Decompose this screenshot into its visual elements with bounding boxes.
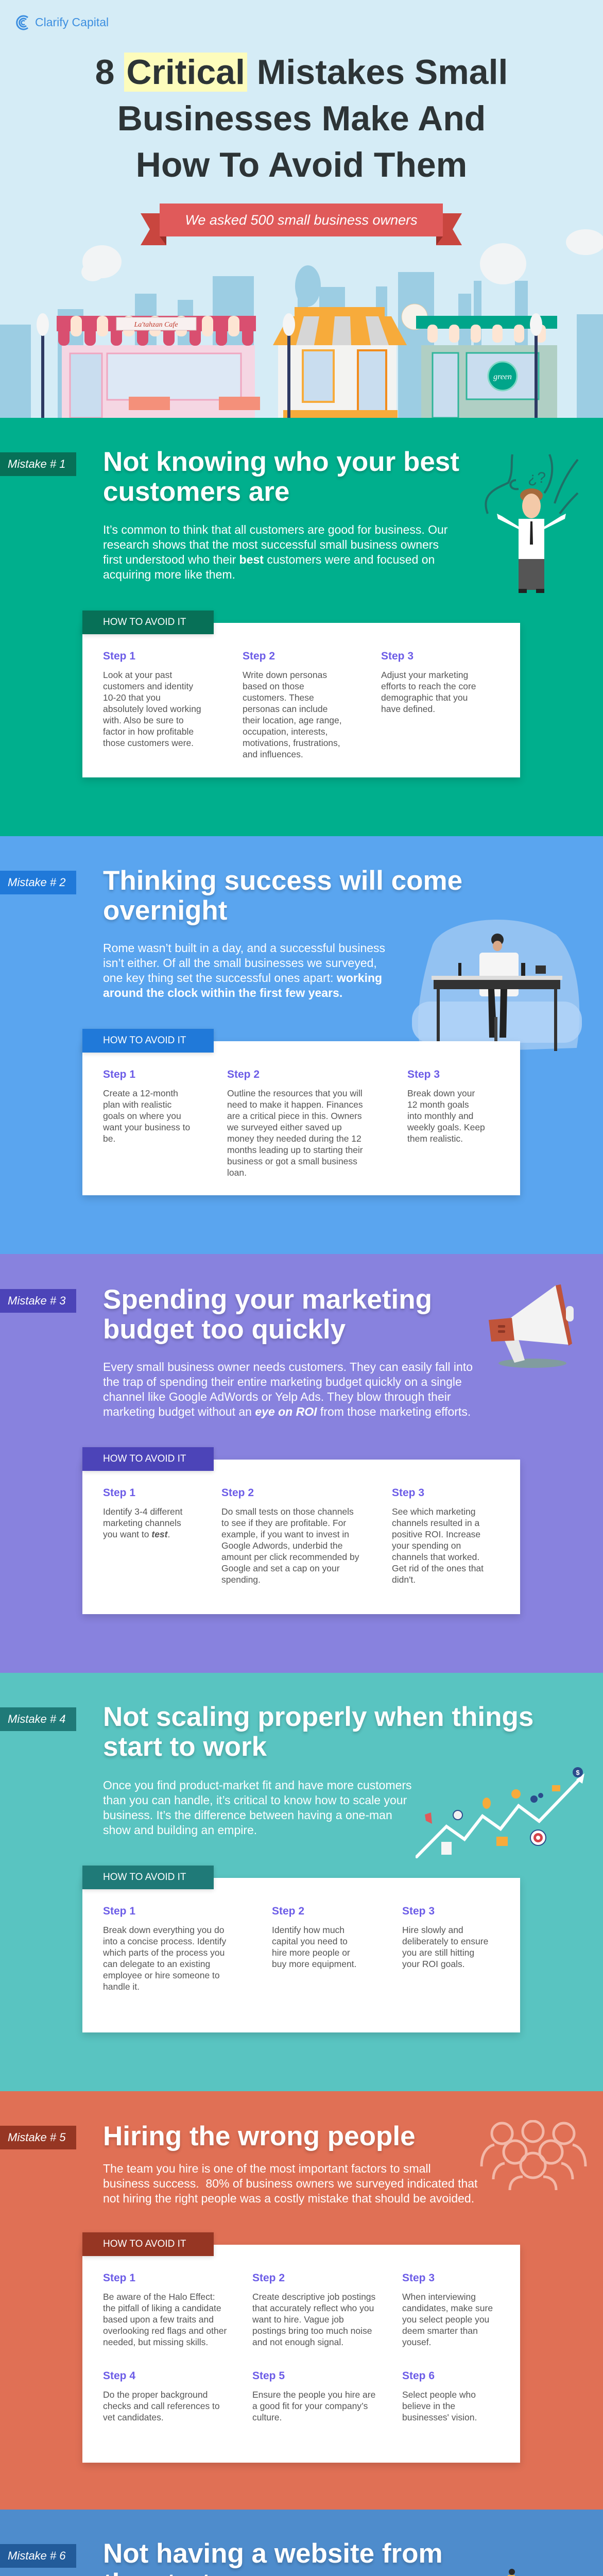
heading 1: customers are [103, 477, 289, 507]
card: steps 5: the pitfall of liking a candidate [103, 2303, 221, 2313]
body text 2: Rome wasn’t built in a day, and a successful business [103, 941, 385, 955]
illustration: street with shops [0, 229, 603, 418]
step 2: Step 2 [221, 1487, 254, 1499]
card: steps 3: marketing channels [103, 1518, 181, 1528]
card: steps 1: customers. These [243, 692, 314, 703]
step 3: Step 3 [402, 2272, 435, 2284]
title [95, 53, 508, 184]
card: steps 2: 12 month goals [407, 1099, 469, 1110]
card: steps 5: want to hire. Vague job [252, 2314, 344, 2325]
card: steps 1: based on those [243, 681, 304, 691]
card: steps 1: efforts to reach the core [381, 681, 476, 691]
heading 3: budget too quickly [103, 1314, 346, 1345]
illustration: growth chart [416, 1767, 584, 1858]
step 3: Step 3 [402, 1905, 435, 1917]
body text 1: first understood who their best customers were and focused on [103, 553, 435, 566]
tab: how to avoid it 1 [82, 611, 214, 634]
card: steps 4: deliberately to ensure [402, 1936, 488, 1946]
card: steps 2: money they needed during the 12 [227, 1133, 361, 1144]
card: steps 3: to see if they are profitable. For [221, 1518, 346, 1528]
card: steps 4: employee or hire someone to [103, 1970, 220, 1980]
card: steps 2: we surveyed either saved up [227, 1122, 342, 1132]
card: steps 3 [82, 1460, 520, 1614]
card: steps 1: personas can include [243, 704, 328, 714]
card: steps 5: and not enough signal. [252, 2337, 343, 2347]
card: steps 5 [82, 2245, 520, 2463]
step 3: Step 3 [392, 1487, 424, 1499]
tab: how to avoid it 3: HOW TO AVOID IT [103, 1453, 186, 1464]
card: steps 4: can delegate to an existing [103, 1959, 210, 1969]
card: steps 3: channels resulted in a [392, 1518, 479, 1528]
card: steps 3: Get rid of the ones that [392, 1563, 484, 1573]
icon: confused man: ¿? [528, 469, 546, 486]
mistake tag 5: Mistake # 5 [8, 2131, 66, 2144]
step 3: Step 3 [381, 650, 414, 662]
title: How To Avoid Them [136, 145, 467, 184]
heading 3: Spending your marketing [103, 1284, 432, 1315]
card: steps 1: have defined. [381, 704, 435, 714]
card: steps 5: vet candidates. [103, 2412, 164, 2422]
body text 3: Every small business owner needs customers. They can easily fall into [103, 1360, 473, 1374]
card: steps 2: business or got a small business [227, 1156, 357, 1166]
illustration: computer with people [508, 2569, 515, 2576]
illustration: street with shops: green [493, 372, 512, 381]
heading 2: Thinking success will come [103, 866, 462, 896]
card: steps 1: factor in how profitable [103, 726, 194, 737]
card: steps 1: Adjust your marketing [381, 670, 468, 680]
mistake tag 4 [0, 1707, 76, 1731]
card: steps 5: businesses' vision. [402, 2412, 477, 2422]
body text 5: not hiring the right people was a costly mistake that should be avoided. [103, 2192, 474, 2205]
body text 3: marketing budget without an eye on ROI from those marketing efforts. [103, 1405, 471, 1418]
card: steps 4: buy more equipment. [272, 1959, 356, 1969]
card: steps 1: absolutely loved working [103, 704, 201, 714]
card: steps 5: based upon a few traits and [103, 2314, 214, 2325]
card: steps 4: you are still hitting [402, 1947, 474, 1958]
heading 1 [103, 447, 459, 507]
card: steps 3: Do small tests on those channels [221, 1506, 354, 1517]
card: steps 1: Look at your past [103, 670, 172, 680]
card: steps 4: Hire slowly and [402, 1925, 463, 1935]
card: steps 3: Identify 3-4 different [103, 1506, 182, 1517]
heading 1: Not knowing who your best [103, 447, 459, 477]
card: steps 2: Break down your [407, 1088, 475, 1098]
heading 3 [103, 1284, 432, 1347]
card: steps 4: which parts of the process you [103, 1947, 225, 1958]
mistake tag 6 [0, 2544, 76, 2568]
card: steps 2: Create a 12-month [103, 1088, 178, 1098]
panel: mistake 5 [0, 2091, 603, 2510]
card: steps 4: into a concise process. Identify [103, 1936, 226, 1946]
body text 3 [103, 1360, 473, 1418]
body text 1: research shows that the most successful small business owners [103, 538, 439, 551]
body text 4: show and building an empire. [103, 1823, 257, 1837]
title: Businesses Make And [117, 99, 486, 138]
icon: group of people [480, 2120, 587, 2190]
card: steps 2: Outline the resources that you will [227, 1088, 363, 1098]
illustration: growth chart: $ [576, 1769, 580, 1776]
body text 4: Once you find product-market fit and have more customers [103, 1778, 412, 1792]
mistake tag 6: Mistake # 6 [8, 2549, 66, 2562]
card: steps 5: yousef. [402, 2337, 431, 2347]
tab: how to avoid it 2: HOW TO AVOID IT [103, 1035, 186, 1046]
heading 4: Not scaling properly when things [103, 1702, 533, 1732]
step 2: Step 2 [227, 1069, 260, 1080]
card: steps 4: your ROI goals. [402, 1959, 465, 1969]
card: steps 1: their location, age range, [243, 715, 342, 725]
card: steps 2 [82, 1041, 520, 1195]
header: sky background [0, 0, 603, 418]
tab: how to avoid it 5 [82, 2232, 214, 2256]
body text 4: business. It’s the difference between having a one-man [103, 1808, 392, 1822]
card: steps 5: that accurately reflect who you [252, 2303, 374, 2313]
step 4: Step 4 [103, 2370, 135, 2382]
card: steps 3: you want to test. [103, 1529, 170, 1539]
card: steps 4 [82, 1878, 520, 2032]
card: steps 2: weekly goals. Keep [407, 1122, 485, 1132]
card: steps 5: deem smarter than [402, 2326, 478, 2336]
card: steps 2: be. [103, 1133, 115, 1144]
step 1: Step 1 [103, 1069, 135, 1080]
illustration: street with shops: La'tahzan Cafe [133, 321, 178, 329]
mistake tag 5 [0, 2126, 76, 2149]
card: steps 4: Break down everything you do [103, 1925, 224, 1935]
tab: how to avoid it 4: HOW TO AVOID IT [103, 1872, 186, 1883]
card: steps 3: channels that worked. [392, 1552, 479, 1562]
panel: mistake 2 [0, 836, 603, 1254]
tab: how to avoid it 4 [82, 1866, 214, 1889]
card: steps 5: postings bring too much noise [252, 2326, 372, 2336]
card: steps 3: positive ROI. Increase [392, 1529, 480, 1539]
icon: confused man [485, 454, 579, 593]
tab: how to avoid it 1: HOW TO AVOID IT [103, 617, 186, 628]
mistake tag 1: Mistake # 1 [8, 457, 66, 470]
card: steps 5: checks and call references to [103, 2401, 220, 2411]
step 2: Step 2 [243, 650, 275, 662]
card: steps 5: needed, but missing skills. [103, 2337, 208, 2347]
card: steps 3: See which marketing [392, 1506, 475, 1517]
card: steps 1: motivations, frustrations, [243, 738, 340, 748]
tab: how to avoid it 2 [82, 1029, 214, 1053]
card: steps 3: spending. [221, 1574, 261, 1585]
panel: mistake 3 [0, 1254, 603, 1673]
card: steps 1: demographic that you [381, 692, 468, 703]
mistake tag 2: Mistake # 2 [8, 876, 66, 889]
step 2: Step 2 [272, 1905, 304, 1917]
mistake tag 3 [0, 1289, 76, 1313]
icon: megaphone [489, 1284, 574, 1368]
card: steps 4: handle it. [103, 1981, 140, 1992]
title: 8 Critical Mistakes Small [95, 53, 508, 92]
step 1: Step 1 [103, 1905, 135, 1917]
card: steps 2: loan. [227, 1167, 247, 1178]
card: steps 5: you select people you [402, 2314, 489, 2325]
card: steps 5: Do the proper background [103, 2389, 208, 2400]
body text 4: than you can handle, it’s critical to know how to scale your [103, 1793, 407, 1807]
card: steps 1: those customers were. [103, 738, 194, 748]
body text 3: channel like Google AdWords or Yelp Ads. They blow through their [103, 1390, 451, 1403]
mistake tag 3: Mistake # 3 [8, 1294, 66, 1307]
card: steps 3: Google and set a cap on your [221, 1563, 340, 1573]
card: steps 2: plan with realistic [103, 1099, 171, 1110]
card: steps 5: Be aware of the Halo Effect: [103, 2292, 215, 2302]
card: steps 2: are a critical piece in this. Owners [227, 1111, 362, 1121]
heading 2: overnight [103, 895, 227, 926]
heading 2 [102, 866, 462, 928]
body text 5 [103, 2162, 478, 2205]
card: steps 5: overlooking red flags and other [103, 2326, 227, 2336]
card: steps 1: occupation, interests, [243, 726, 328, 737]
tab: how to avoid it 3 [82, 1447, 214, 1471]
card: steps 1: 10-20 that you [103, 692, 161, 703]
panel: mistake 6 [0, 2510, 603, 2576]
card: steps 1: with. Also be sure to [103, 715, 184, 725]
ribbon: subtitle: We asked 500 small business owners [185, 212, 418, 228]
card: steps 5: When interviewing [402, 2292, 476, 2302]
mistake tag 4: Mistake # 4 [8, 1713, 66, 1725]
heading 4 [103, 1702, 533, 1762]
body text 2: one key thing set the successful ones apart: working [103, 971, 382, 985]
card: steps 1: customers and identity [103, 681, 193, 691]
card: steps 4: capital you need to [272, 1936, 348, 1946]
body text 2 [103, 941, 385, 999]
tab: how to avoid it 5: HOW TO AVOID IT [103, 2239, 186, 2249]
card: steps 5: believe in the [402, 2401, 455, 2411]
body text 2: isn’t either. Of all the small businesses we surveyed, [103, 956, 377, 970]
body text 1: acquiring more like them. [103, 568, 235, 581]
card: steps 5: Select people who [402, 2389, 476, 2400]
body text 5: business success. 80% of business owners we surveyed indicated that [103, 2177, 477, 2190]
card: steps 5: Ensure the people you hire are [252, 2389, 375, 2400]
step 2: Step 2 [252, 2272, 285, 2284]
step 1: Step 1 [103, 1487, 135, 1499]
card: steps 3: your spending on [392, 1540, 461, 1551]
card: steps 1: Write down personas [243, 670, 327, 680]
card: steps 2: into monthly and [407, 1111, 473, 1121]
card: steps 5: a good fit for your company’s [252, 2401, 368, 2411]
body text 1: It’s common to think that all customers are good for business. Our [103, 523, 447, 536]
card: steps 3: didn't. [392, 1574, 416, 1585]
card: steps 4: hire more people or [272, 1947, 350, 1958]
step 5: Step 5 [252, 2370, 285, 2382]
ribbon: subtitle [141, 204, 462, 245]
heading 5: Hiring the wrong people [103, 2121, 416, 2151]
card: steps 1 [82, 623, 520, 777]
card: steps 3: amount per click recommended by [221, 1552, 359, 1562]
heading 6: Not having a website from [103, 2538, 443, 2569]
body text 5: The team you hire is one of the most important factors to small [103, 2162, 431, 2175]
card: steps 3: example, if you want to invest in [221, 1529, 349, 1539]
body text 4 [103, 1778, 412, 1837]
body text 3: the trap of spending their entire marketing budget quickly on a single [103, 1375, 462, 1388]
card: steps 5: candidates, make sure [402, 2303, 493, 2313]
card: steps 2: want your business to [103, 1122, 190, 1132]
card: steps 2: need to make it happen. Finances [227, 1099, 363, 1110]
step 1: Step 1 [103, 650, 135, 662]
card: steps 5: Create descriptive job postings [252, 2292, 375, 2302]
logo: Clarify Capital [35, 15, 109, 29]
card: steps 3: Google Adwords, underbid the [221, 1540, 342, 1551]
illustration: person at desk [412, 920, 582, 1051]
panel: mistake 1 [0, 418, 603, 836]
mistake tag 1 [0, 452, 76, 476]
card: steps 1: and influences. [243, 749, 303, 759]
card: steps 2: them realistic. [407, 1133, 463, 1144]
step 6: Step 6 [402, 2370, 435, 2382]
body text 1 [103, 523, 448, 581]
card: steps 5: culture. [252, 2412, 282, 2422]
card: steps 2: months leading up to starting their [227, 1145, 363, 1155]
mistake tag 2 [0, 871, 76, 894]
card: steps 2: goals on where you [103, 1111, 181, 1121]
heading 4: start to work [103, 1732, 267, 1762]
card: steps 4: Identify how much [272, 1925, 344, 1935]
step 1: Step 1 [103, 2272, 135, 2284]
panel: mistake 4 [0, 1673, 603, 2091]
step 3: Step 3 [407, 1069, 440, 1080]
body text 2: around the clock within the first few years. [103, 986, 342, 999]
